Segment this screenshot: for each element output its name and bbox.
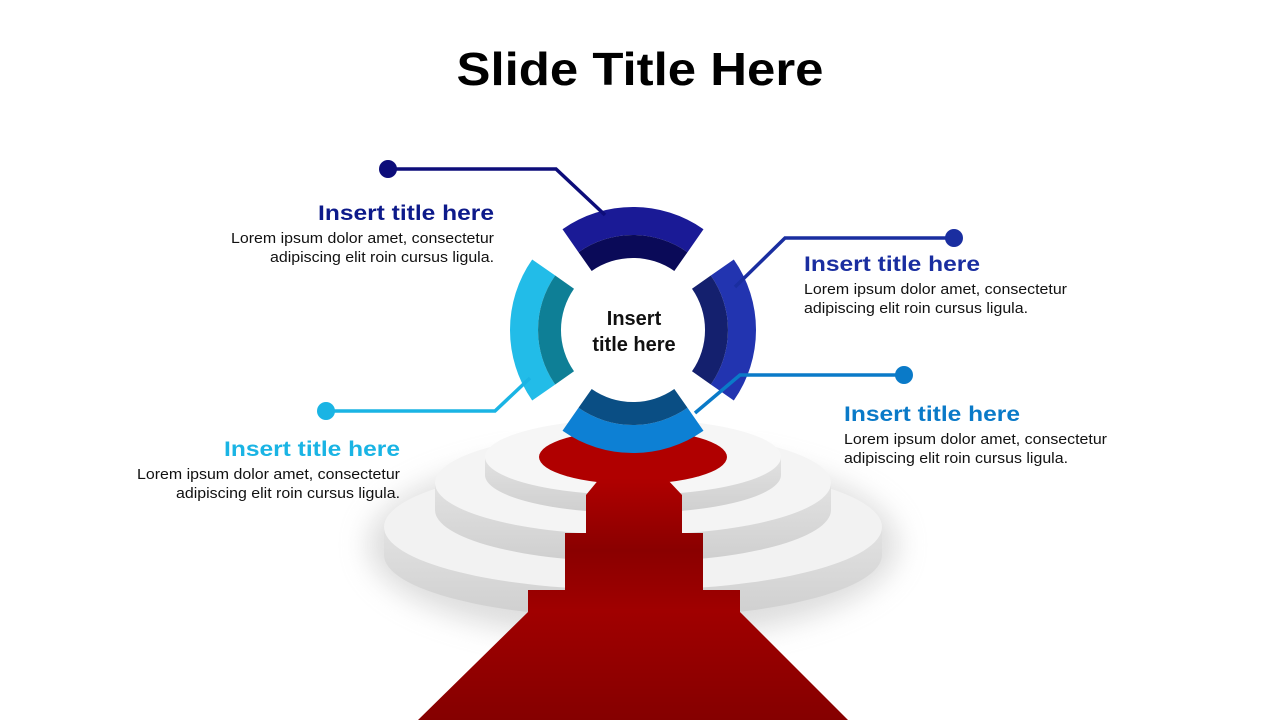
text block: right-top: Insert title here — [804, 253, 980, 276]
segment: bottom — [562, 389, 704, 453]
text block: left — [137, 438, 400, 502]
segment: left — [510, 260, 574, 400]
text block: left: Insert title here — [224, 438, 400, 461]
text block: left: Lorem ipsum dolor amet, consectetur — [137, 466, 400, 483]
segment: top — [562, 207, 704, 271]
center text: Insert — [607, 308, 661, 330]
text block: top-left: Lorem ipsum dolor amet, consectetur — [231, 230, 494, 247]
red carpet — [418, 430, 848, 720]
text block: top-left: Insert title here — [318, 202, 494, 225]
center text: title here — [592, 334, 676, 356]
text block: top-left — [231, 202, 494, 266]
segment: right — [692, 260, 756, 400]
connector: right-bottom — [695, 366, 913, 413]
title: Slide Title Here — [456, 43, 824, 95]
text block: right-top: Lorem ipsum dolor amet, consectetur — [804, 281, 1067, 298]
text block: left: adipiscing elit roin cursus ligula. — [176, 485, 400, 502]
text block: right-top: adipiscing elit roin cursus ligula. — [804, 300, 1028, 317]
text block: right-top — [804, 253, 1067, 317]
text block: right-bottom: Lorem ipsum dolor amet, consectetur — [844, 431, 1107, 448]
connector: left — [317, 378, 530, 420]
text block: top-left: adipiscing elit roin cursus ligula. — [270, 249, 494, 266]
text block: right-bottom: Insert title here — [844, 403, 1020, 426]
connector: top-left — [379, 160, 605, 215]
connector: right-top — [735, 229, 963, 287]
podium — [368, 419, 898, 640]
text block: right-bottom — [844, 403, 1107, 467]
text block: right-bottom: adipiscing elit roin cursus ligula. — [844, 450, 1068, 467]
ring diagram — [510, 207, 756, 453]
